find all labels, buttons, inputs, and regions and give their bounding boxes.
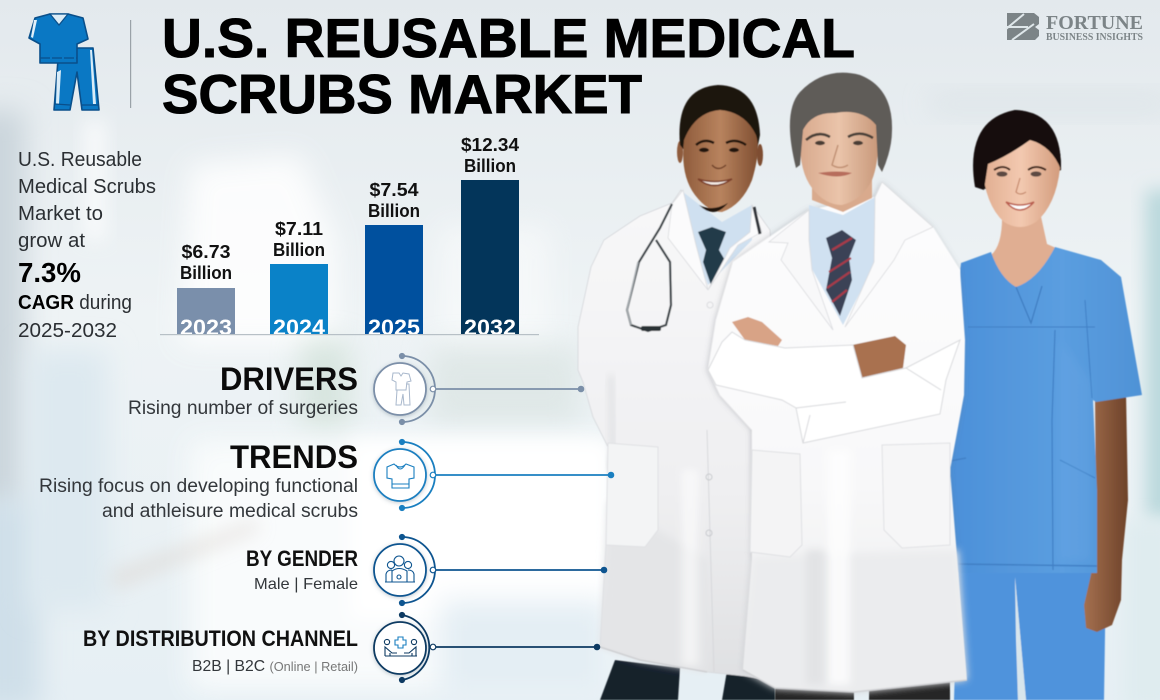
CAGR text block: CAGR during xyxy=(18,292,132,314)
header divider xyxy=(130,20,131,108)
left doctor xyxy=(578,85,780,700)
bar 2023 xyxy=(177,241,235,340)
nurse xyxy=(943,110,1142,700)
bar 2025: Billion xyxy=(368,200,420,221)
bar 2032: $12.34 xyxy=(461,134,520,155)
bar 2032: 2032 xyxy=(464,315,516,340)
by distribution channel heading and text: B2B | B2C (Online | Retail) xyxy=(192,658,358,675)
bar 2032: Billion xyxy=(464,155,516,176)
connector: by gender xyxy=(374,535,606,605)
bar 2023: $6.73 xyxy=(182,241,230,262)
connector: drivers xyxy=(374,354,583,424)
trends heading and text: Rising focus on developing functional xyxy=(39,476,358,497)
icon: scrubs outline xyxy=(392,373,411,405)
CAGR text block: grow at xyxy=(18,230,85,252)
title: U.S. REUSABLE MEDICAL xyxy=(162,7,855,69)
CAGR text block: 2025-2032 xyxy=(18,320,117,342)
CAGR text block: Medical Scrubs xyxy=(18,176,156,198)
bar 2024: 2024 xyxy=(273,315,326,340)
drivers heading and text: DRIVERS xyxy=(220,361,358,397)
by distribution channel heading and text xyxy=(83,626,358,675)
trends heading and text xyxy=(39,439,358,522)
title: SCRUBS MARKET xyxy=(162,63,642,125)
bar 2023: 2023 xyxy=(180,315,232,340)
by gender heading and text: BY GENDER xyxy=(246,546,358,571)
bar 2025: 2025 xyxy=(368,315,420,340)
trends heading and text: TRENDS xyxy=(230,439,358,475)
by gender heading and text xyxy=(246,546,358,593)
icon: t-shirt xyxy=(387,464,414,488)
drivers heading and text xyxy=(128,361,358,419)
by gender heading and text: Male | Female xyxy=(254,576,358,593)
bar 2025: $7.54 xyxy=(370,179,419,200)
by distribution channel heading and text: BY DISTRIBUTION CHANNEL xyxy=(83,626,358,651)
bar 2024 xyxy=(270,218,328,340)
logo: Fortune Business Insights xyxy=(1006,12,1143,43)
CAGR text block xyxy=(18,149,156,342)
CAGR text block: Market to xyxy=(18,203,103,225)
logo: Fortune Business Insights: FORTUNE xyxy=(1046,12,1143,34)
bar 2024: Billion xyxy=(273,239,325,260)
center doctor xyxy=(708,73,967,700)
icon: scrubs suit xyxy=(29,14,99,110)
logo: Fortune Business Insights: BUSINESS INSIGHTS xyxy=(1046,32,1143,43)
connector: trends xyxy=(374,440,613,510)
connector: by distribution channel xyxy=(374,613,599,682)
bar 2023: Billion xyxy=(180,262,232,283)
bar 2024: $7.11 xyxy=(275,218,323,239)
icon: medical staff group xyxy=(385,556,415,582)
CAGR text block: U.S. Reusable xyxy=(18,149,142,171)
trends heading and text: and athleisure medical scrubs xyxy=(102,501,358,522)
title xyxy=(162,7,855,125)
drivers heading and text: Rising number of surgeries xyxy=(128,398,358,419)
photo: three medical professionals xyxy=(578,73,1142,700)
CAGR text block: 7.3% xyxy=(18,257,81,288)
icon: two people at table with medical cross xyxy=(384,637,417,656)
bar chart: market size xyxy=(160,134,539,340)
bar 2032 xyxy=(461,134,520,340)
bar 2025 xyxy=(365,179,423,340)
